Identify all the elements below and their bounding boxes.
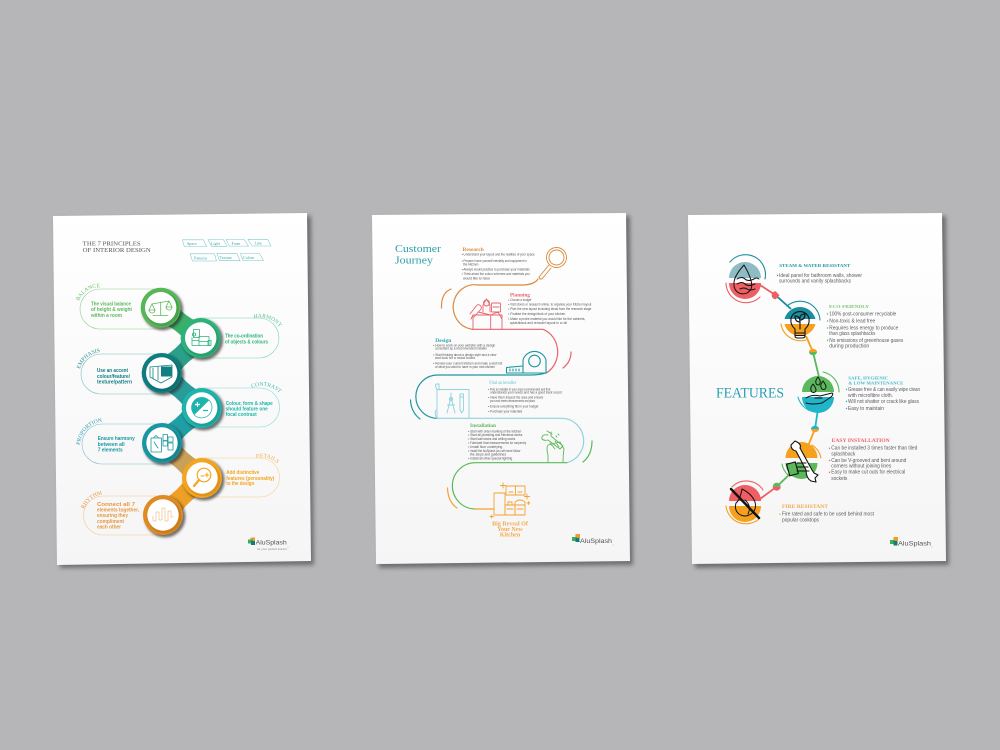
- feature text: safe and hygienic: Easy to maintain: [848, 406, 884, 412]
- list: planning: • Choose a budget: [508, 298, 531, 302]
- text: details: features (personality): [226, 476, 275, 482]
- list: design: and look for a mood board: [435, 356, 475, 360]
- feature circle: eco friendly bulb: [781, 301, 820, 341]
- logo: AluSplash: [890, 537, 932, 548]
- heading: customer journey: Journey: [395, 255, 434, 267]
- list: installation: • Install the AluSplash you will need follow: [468, 449, 521, 453]
- label: balance: BALANCE: [76, 284, 100, 301]
- heading: planning: Planning: [510, 292, 530, 298]
- label: rhythm: RHYTHM: [80, 490, 102, 509]
- text: emphasis: Use an accent: [97, 368, 128, 374]
- element tags: Line: [254, 241, 262, 246]
- list: research: the kitchen: [463, 262, 479, 266]
- pill: emphasis: [81, 354, 165, 394]
- feature text: safe and hygienic: with microfibre cloth.: [848, 393, 893, 399]
- feature text: easy installation: Easy to make cut outs for electrical: [831, 470, 905, 476]
- list: installation: • Start all plumbing and electrical works: [468, 433, 523, 437]
- feature text: easy installation: sockets: [831, 476, 848, 482]
- text: emphasis: [97, 368, 132, 386]
- text: proportion: Ensure harmony: [98, 436, 135, 442]
- text: harmony: of objects & colours: [225, 340, 268, 346]
- logo: AluSplash: [572, 534, 613, 545]
- caption: big reveal: Kitchen: [500, 532, 521, 538]
- text: emphasis: texture/pattern: [97, 380, 132, 386]
- feature circle: steam and water: [726, 255, 765, 303]
- feature text: safe and hygienic: [846, 376, 920, 412]
- list: research: • Prepare home yourself mentally and equipment in: [462, 259, 527, 263]
- icon: tape measure: [506, 351, 546, 373]
- logo: AluSplash: [248, 538, 288, 551]
- list: design: consultant as a recommended installer: [435, 347, 488, 351]
- label: details: DETAILS: [256, 454, 280, 463]
- feature text: easy installation: splashback: [831, 452, 856, 458]
- text: proportion: 7 elements: [98, 448, 123, 454]
- heading: customer journey: Customer: [395, 243, 441, 255]
- icon: feature wall panel: [161, 366, 172, 376]
- element tags: Form: [232, 241, 241, 246]
- element tags: Space: [187, 241, 197, 246]
- heading: find an installer: Find an installer: [489, 380, 517, 386]
- text: contrast: Colour, form & shape: [226, 401, 273, 407]
- icon: new kitchen: [490, 483, 530, 518]
- caption: big reveal: [492, 522, 529, 538]
- list: find an installer: • Have them inspect the area and ensure: [488, 396, 544, 400]
- logo: AluSplash: AluSplash: [580, 538, 612, 545]
- list: planning: • Finalise the design/look of your kitchen: [508, 312, 566, 316]
- label: emphasis: EMPHASIS: [76, 348, 100, 369]
- text: details: [226, 470, 275, 487]
- pill: rhythm: [84, 496, 165, 535]
- feature text: steam and water resistant: surrounds and vanity splashbacks: [779, 278, 851, 284]
- list: design: • Review your current kitchen and make a wish list: [433, 362, 502, 366]
- list: find an installer: your work meets measurements and plans: [490, 399, 535, 403]
- list: installation: the steps and guidelines: [470, 452, 506, 456]
- feature text: eco friendly: 100% post-consumer recyclable: [829, 312, 896, 318]
- feature circle: safe and hygienic: [798, 372, 839, 413]
- text: balance: within a room: [90, 313, 123, 319]
- text: proportion: between all: [98, 442, 125, 448]
- feature text: fire resistant: Fire rated and safe to be used behind most: [782, 512, 875, 518]
- caption: big reveal: Your New: [497, 527, 523, 533]
- label: contrast: CONTRAST: [251, 382, 282, 393]
- panel: 7 principles poster: [53, 213, 316, 570]
- list: planning: [508, 298, 592, 325]
- feature text: eco friendly: ECO-FRIENDLY: [829, 304, 870, 309]
- heading: installation: Installation: [470, 423, 496, 429]
- feature text: safe and hygienic: Will not shatter or crack like glass: [848, 399, 919, 405]
- feature text: safe and hygienic: & LOW MAINTENANCE: [848, 380, 903, 386]
- text: rhythm: compliment: [97, 519, 124, 525]
- caption: big reveal: Big Reveal Of: [492, 522, 529, 528]
- list: find an installer: [488, 387, 562, 414]
- pill: proportion: [82, 424, 165, 464]
- text: rhythm: [97, 502, 140, 530]
- feature text: steam and water resistant: Ideal panel for bathroom walls, shower: [779, 273, 862, 279]
- list: design: of what you want to have in your new kitchen: [435, 365, 495, 369]
- feature text: eco friendly: during production: [829, 344, 870, 350]
- list: find an installer: understands your needs and has a good track record: [490, 390, 562, 394]
- icon: magnifying glass: [539, 248, 566, 279]
- feature text: fire resistant: [779, 505, 875, 524]
- feature text: steam and water resistant: [777, 263, 862, 284]
- icon: boxes: [470, 299, 502, 330]
- logo: AluSplash: AluSplash: [256, 540, 287, 546]
- feature text: eco friendly: Requires less energy to produce: [829, 326, 898, 332]
- circle: proportion icon: [142, 423, 184, 466]
- heading: design: Design: [435, 338, 451, 344]
- connectors between circles: [152, 296, 212, 525]
- icon: blueprint and drawing tools: [435, 384, 469, 418]
- logo: AluSplash: AluSplash: [898, 540, 932, 548]
- pill: details: [198, 458, 280, 497]
- list: find an installer: • Ensure everything fits in your budget: [488, 404, 538, 408]
- heading: customer journey: [395, 243, 441, 267]
- element tags: Colour: [243, 255, 255, 260]
- text: proportion: [98, 436, 135, 454]
- element tags: Patterns: [194, 255, 208, 260]
- text: rhythm: elements together,: [97, 508, 140, 514]
- feature text: easy installation: EASY INSTALLATION: [832, 439, 890, 444]
- feature circle: fire resistant: [726, 481, 763, 524]
- text: details: to the design: [226, 481, 254, 487]
- element tags: Texture: [220, 255, 232, 260]
- text: emphasis: colour/feature/: [97, 374, 131, 380]
- text: rhythm: each other: [97, 524, 121, 530]
- list: installation: • Start with order marking of the kitchen: [468, 430, 522, 434]
- list: planning: • Visit stores or research online, to organise your Kitchen layout: [508, 302, 591, 306]
- feature circle: easy installation: [782, 441, 821, 482]
- circle: harmony icon: [181, 318, 223, 360]
- element tags: Light: [211, 241, 221, 246]
- pill: balance: [80, 289, 165, 329]
- feature text: eco friendly: Non-toxic & lead free: [829, 318, 876, 324]
- feature text: fire resistant: popular cooktops: [782, 518, 819, 524]
- list: research: would like to have: [463, 276, 490, 280]
- list: research: • Always would practice to purchase your materials: [462, 268, 530, 272]
- list: design: [433, 344, 502, 369]
- text: contrast: focal contrast: [226, 412, 257, 418]
- heading: research: Research: [463, 247, 484, 253]
- text: balance: of height & weight: [91, 307, 132, 313]
- panel: features poster: [688, 213, 949, 568]
- text: rhythm: ensuring they: [97, 513, 128, 519]
- text: rhythm: Connect all 7: [97, 502, 135, 508]
- connector line: [760, 285, 819, 499]
- feature text: easy installation: [829, 439, 917, 482]
- feature text: easy installation: Can be V-grooved and bent around: [831, 458, 907, 464]
- circle: balance icon: [141, 288, 183, 330]
- feature text: steam and water resistant: STEAM & WATER RESISTANT: [779, 263, 850, 268]
- circle: details icon: [182, 458, 224, 500]
- list: installation: • Fabricate final measurements for carpentry: [468, 441, 527, 445]
- feature text: easy installation: Can be installed 3 times faster than tiled: [831, 446, 917, 452]
- label: harmony: HARMONY: [253, 314, 282, 326]
- list: planning: • Plan the new layout including ideas from the research stage: [508, 307, 592, 311]
- label: proportion: PROPORTION: [76, 418, 102, 445]
- text: contrast: should feature one: [226, 406, 268, 412]
- text: harmony: [225, 334, 268, 346]
- heading: features: FEATURES: [716, 386, 784, 402]
- pill: harmony: [198, 318, 279, 358]
- text: balance: The visual balance: [91, 302, 131, 308]
- heading: 7 principles: [83, 240, 151, 254]
- list: installation: • Install floor underlying: [468, 445, 503, 449]
- logo: AluSplash: for your perfect interior: [257, 547, 287, 551]
- panel: customer journey poster: [372, 213, 633, 568]
- feature text: safe and hygienic: SAFE, HYGIENIC: [848, 376, 888, 380]
- nodes on the connector: [772, 291, 819, 491]
- feature text: safe and hygienic: Grease free & can easily wipe clean: [848, 387, 920, 393]
- list: research: • Understand your layout and the realities of your space: [462, 253, 535, 257]
- feature text: fire resistant: FIRE RESISTANT: [782, 505, 829, 510]
- text: harmony: The co-ordination: [225, 334, 263, 340]
- circle: emphasis icon: [142, 353, 184, 396]
- list: research: • Think about the colour schemes and materials you: [462, 272, 530, 276]
- feature text: eco friendly: [827, 304, 904, 350]
- list: design: • How to work on your website with a design: [433, 344, 496, 348]
- feature text: eco friendly: No emissions of greenhouse gases: [829, 338, 904, 344]
- list: design: • Start thinking about a design style and a view: [433, 353, 497, 357]
- text: balance: [90, 302, 132, 319]
- list: installation: • Install all other special lighting: [468, 456, 513, 460]
- journey path: [410, 279, 592, 509]
- pill: contrast: [198, 388, 280, 427]
- list: planning: splashback and remodel layout in a roll: [510, 321, 567, 325]
- list: research: [462, 253, 535, 280]
- element tags: [182, 239, 271, 261]
- list: find an installer: • Purchase your materials: [488, 410, 523, 414]
- text: details: Add distinctive: [226, 470, 259, 476]
- feature text: eco friendly: than glass splashbacks: [829, 331, 876, 337]
- list: installation: • Start wall works and ceiling works: [468, 437, 516, 441]
- heading: 7 principles: OF INTERIOR DESIGN: [83, 247, 151, 254]
- text: contrast: [226, 401, 273, 418]
- circle: rhythm icon: [143, 495, 186, 538]
- heading: 7 principles: THE 7 PRINCIPLES: [83, 240, 141, 248]
- icon: hand holding wrench: [542, 431, 564, 462]
- list: planning: • Make a probe material you would like for the cabinets,: [508, 317, 585, 321]
- feature text: easy installation: corners without joining lines: [831, 464, 892, 470]
- list: installation: [468, 430, 527, 460]
- circle: contrast icon: [182, 388, 224, 430]
- list: find an installer: • Find an installer in your area recommended and that: [488, 387, 550, 391]
